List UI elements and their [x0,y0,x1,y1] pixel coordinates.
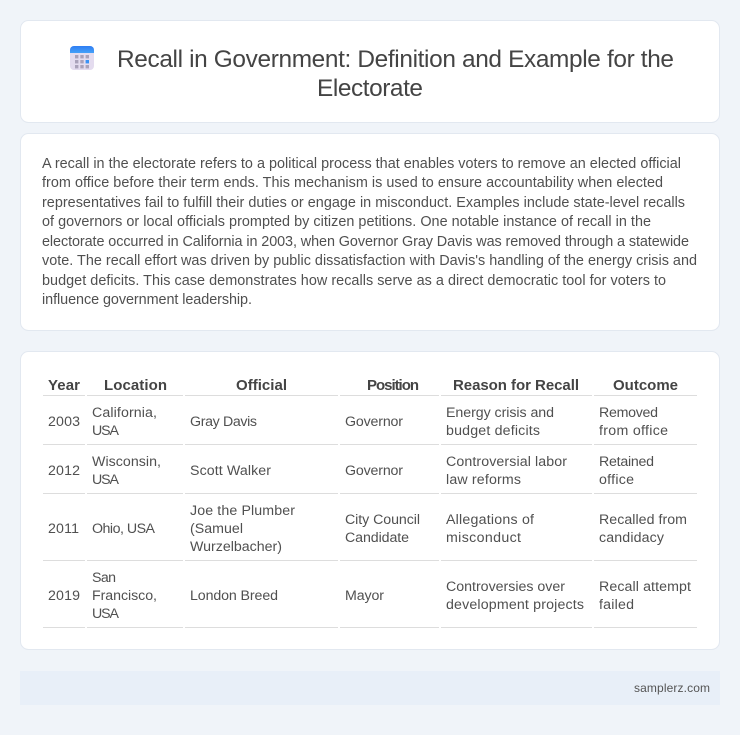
table row: 2019: Controversies over [446,579,565,595]
description text: electorate occurred in California in 2003, when Governor Gray Davis was removed through a statewide [42,234,689,250]
table row: 2012: Controversial labor [446,454,567,470]
table row: 2011: Joe the Plumber [190,503,295,519]
table row: 2011: Allegations of [446,512,534,528]
table row: 2003: USA [92,423,120,439]
table row: 2012: office [599,472,634,488]
table header row: Position [367,377,419,394]
table row: 2003: Removed [599,405,658,421]
table row: 2012 [43,454,697,494]
table row: 2012: Wisconsin, [92,454,161,470]
footer [20,671,720,705]
table row: 2003 [43,405,697,445]
table row: 2012: 2012 [48,463,80,479]
table row: 2003: budget deficits [446,423,540,439]
table header row: Location [104,377,167,394]
panel: recall table [20,352,720,650]
table row: 2011: Candidate [345,530,409,546]
description text: influence government leadership. [42,292,252,308]
description text: representatives fail to fulfill their duties or engage in misconduct. Examples include state-level recalls [42,195,685,211]
table row: 2011 [43,503,697,561]
title [117,46,674,102]
table row: 2011: Recalled from [599,512,687,528]
table row: 2011: candidacy [599,530,665,546]
description text: vote. The recall effort was driven by public dissatisfaction with Davis's handling of the energy crisis and [42,253,697,269]
title: Recall in Government: Definition and Example for the [117,46,674,73]
table row: 2012: Retained [599,454,654,470]
table row: 2011: Wurzelbacher) [190,539,282,555]
table row: 2019: USA [92,606,120,622]
table row: 2012: Scott Walker [190,463,271,479]
table row: 2012: law reforms [446,472,521,488]
panel: header [20,20,720,122]
table row: 2011: misconduct [446,530,521,546]
table row: 2003: 2003 [48,414,80,430]
description text [42,156,697,308]
table row: 2011: City Council [345,512,420,528]
table row: 2012: Governor [345,463,403,479]
table row: 2011: 2011 [48,521,79,537]
table row: 2019: Mayor [345,588,384,604]
table row: 2019: London Breed [190,588,278,604]
table row: 2019: San [92,570,116,586]
table header row: Year [48,377,80,394]
table header row [43,377,697,396]
table row: 2003: California, [92,405,157,421]
description text: from office before their term ends. This mechanism is used to ensure accountability when elected [42,175,663,191]
table header row: Outcome [613,377,678,394]
table row: 2003: Energy crisis and [446,405,554,421]
description text: A recall in the electorate refers to a political process that enables voters to remove an elected official [42,156,681,172]
description text: of governors or local officials prompted by citizen petitions. One notable instance of recall in the [42,214,651,230]
panel: description [20,134,720,330]
icon: calendar [70,46,94,70]
table header row: Official [236,377,287,394]
table row: 2019: 2019 [48,588,80,604]
table header row: Reason for Recall [453,377,579,394]
table row: 2011: Ohio, USA [92,521,156,537]
description text: budget deficits. This case demonstrates how recalls serve as a direct democratic tool for voters to [42,273,666,289]
table row: 2019: failed [599,597,634,613]
footer source text: samplerz.com [634,681,710,695]
table row: 2003: Gray Davis [190,414,257,430]
table row: 2003: Governor [345,414,403,430]
title: Electorate [317,75,423,102]
table row: 2011: (Samuel [190,521,243,537]
table row: 2019: Recall attempt [599,579,691,595]
table row: 2012: USA [92,472,120,488]
table row: 2019: Francisco, [92,588,157,604]
table row: 2019 [43,570,697,628]
table row: 2003: from office [599,423,668,439]
table row: 2019: development projects [446,597,584,613]
